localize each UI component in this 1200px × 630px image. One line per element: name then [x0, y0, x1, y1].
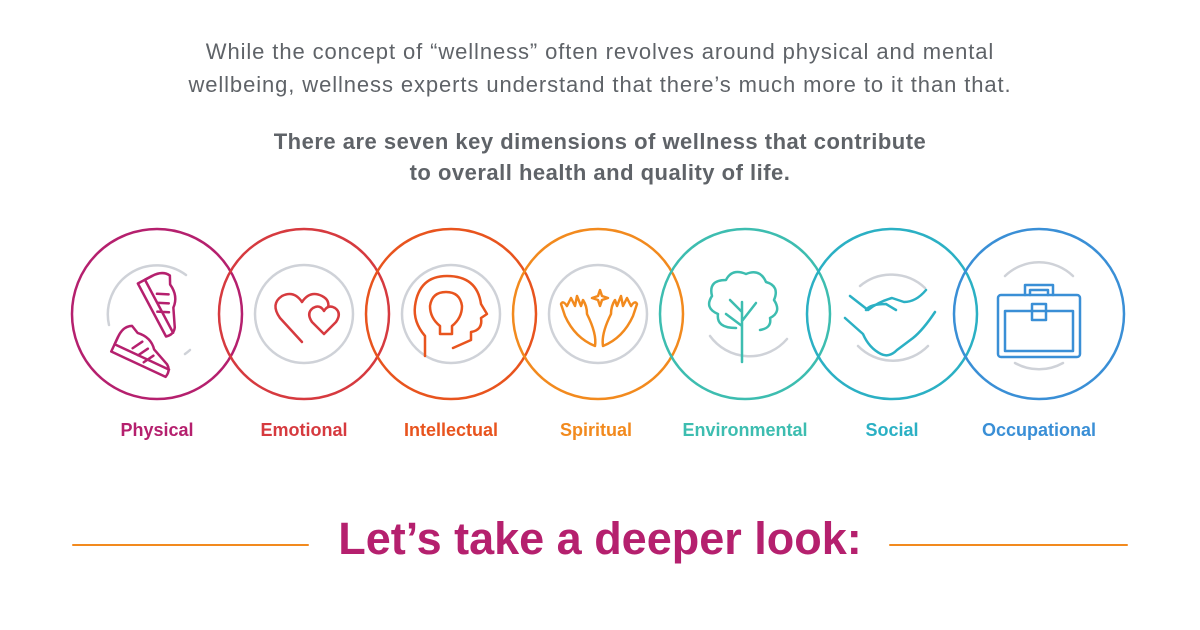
key statement: There are seven key dimensions of wellness that contribute — [274, 129, 926, 154]
key statement — [274, 129, 926, 185]
circle: occupational — [954, 229, 1124, 399]
circle: social — [807, 229, 977, 399]
heading: deeper look: Let’s take a deeper look: — [338, 513, 862, 564]
accent lines — [73, 544, 1127, 546]
key statement: to overall health and quality of life. — [410, 160, 790, 185]
intro text: While the concept of “wellness” often revolves around physical and mental — [206, 39, 994, 64]
label: Emotional: Emotional — [260, 420, 348, 440]
circle: spiritual — [513, 229, 683, 399]
circle: environmental — [660, 229, 830, 399]
circle: intellectual — [366, 229, 536, 399]
label: Spiritual: Spiritual — [560, 420, 632, 440]
label: Occupational: Occupational — [982, 420, 1096, 440]
label: Environmental: Environmental — [682, 420, 808, 440]
circle: physical — [72, 229, 242, 399]
label: Social: Social — [865, 420, 919, 440]
circle: emotional — [219, 229, 389, 399]
label: Intellectual: Intellectual — [404, 420, 498, 440]
intro text — [188, 39, 1012, 97]
label: Physical: Physical — [120, 420, 194, 440]
intro text: wellbeing, wellness experts understand that there’s much more to it than that. — [188, 72, 1012, 97]
